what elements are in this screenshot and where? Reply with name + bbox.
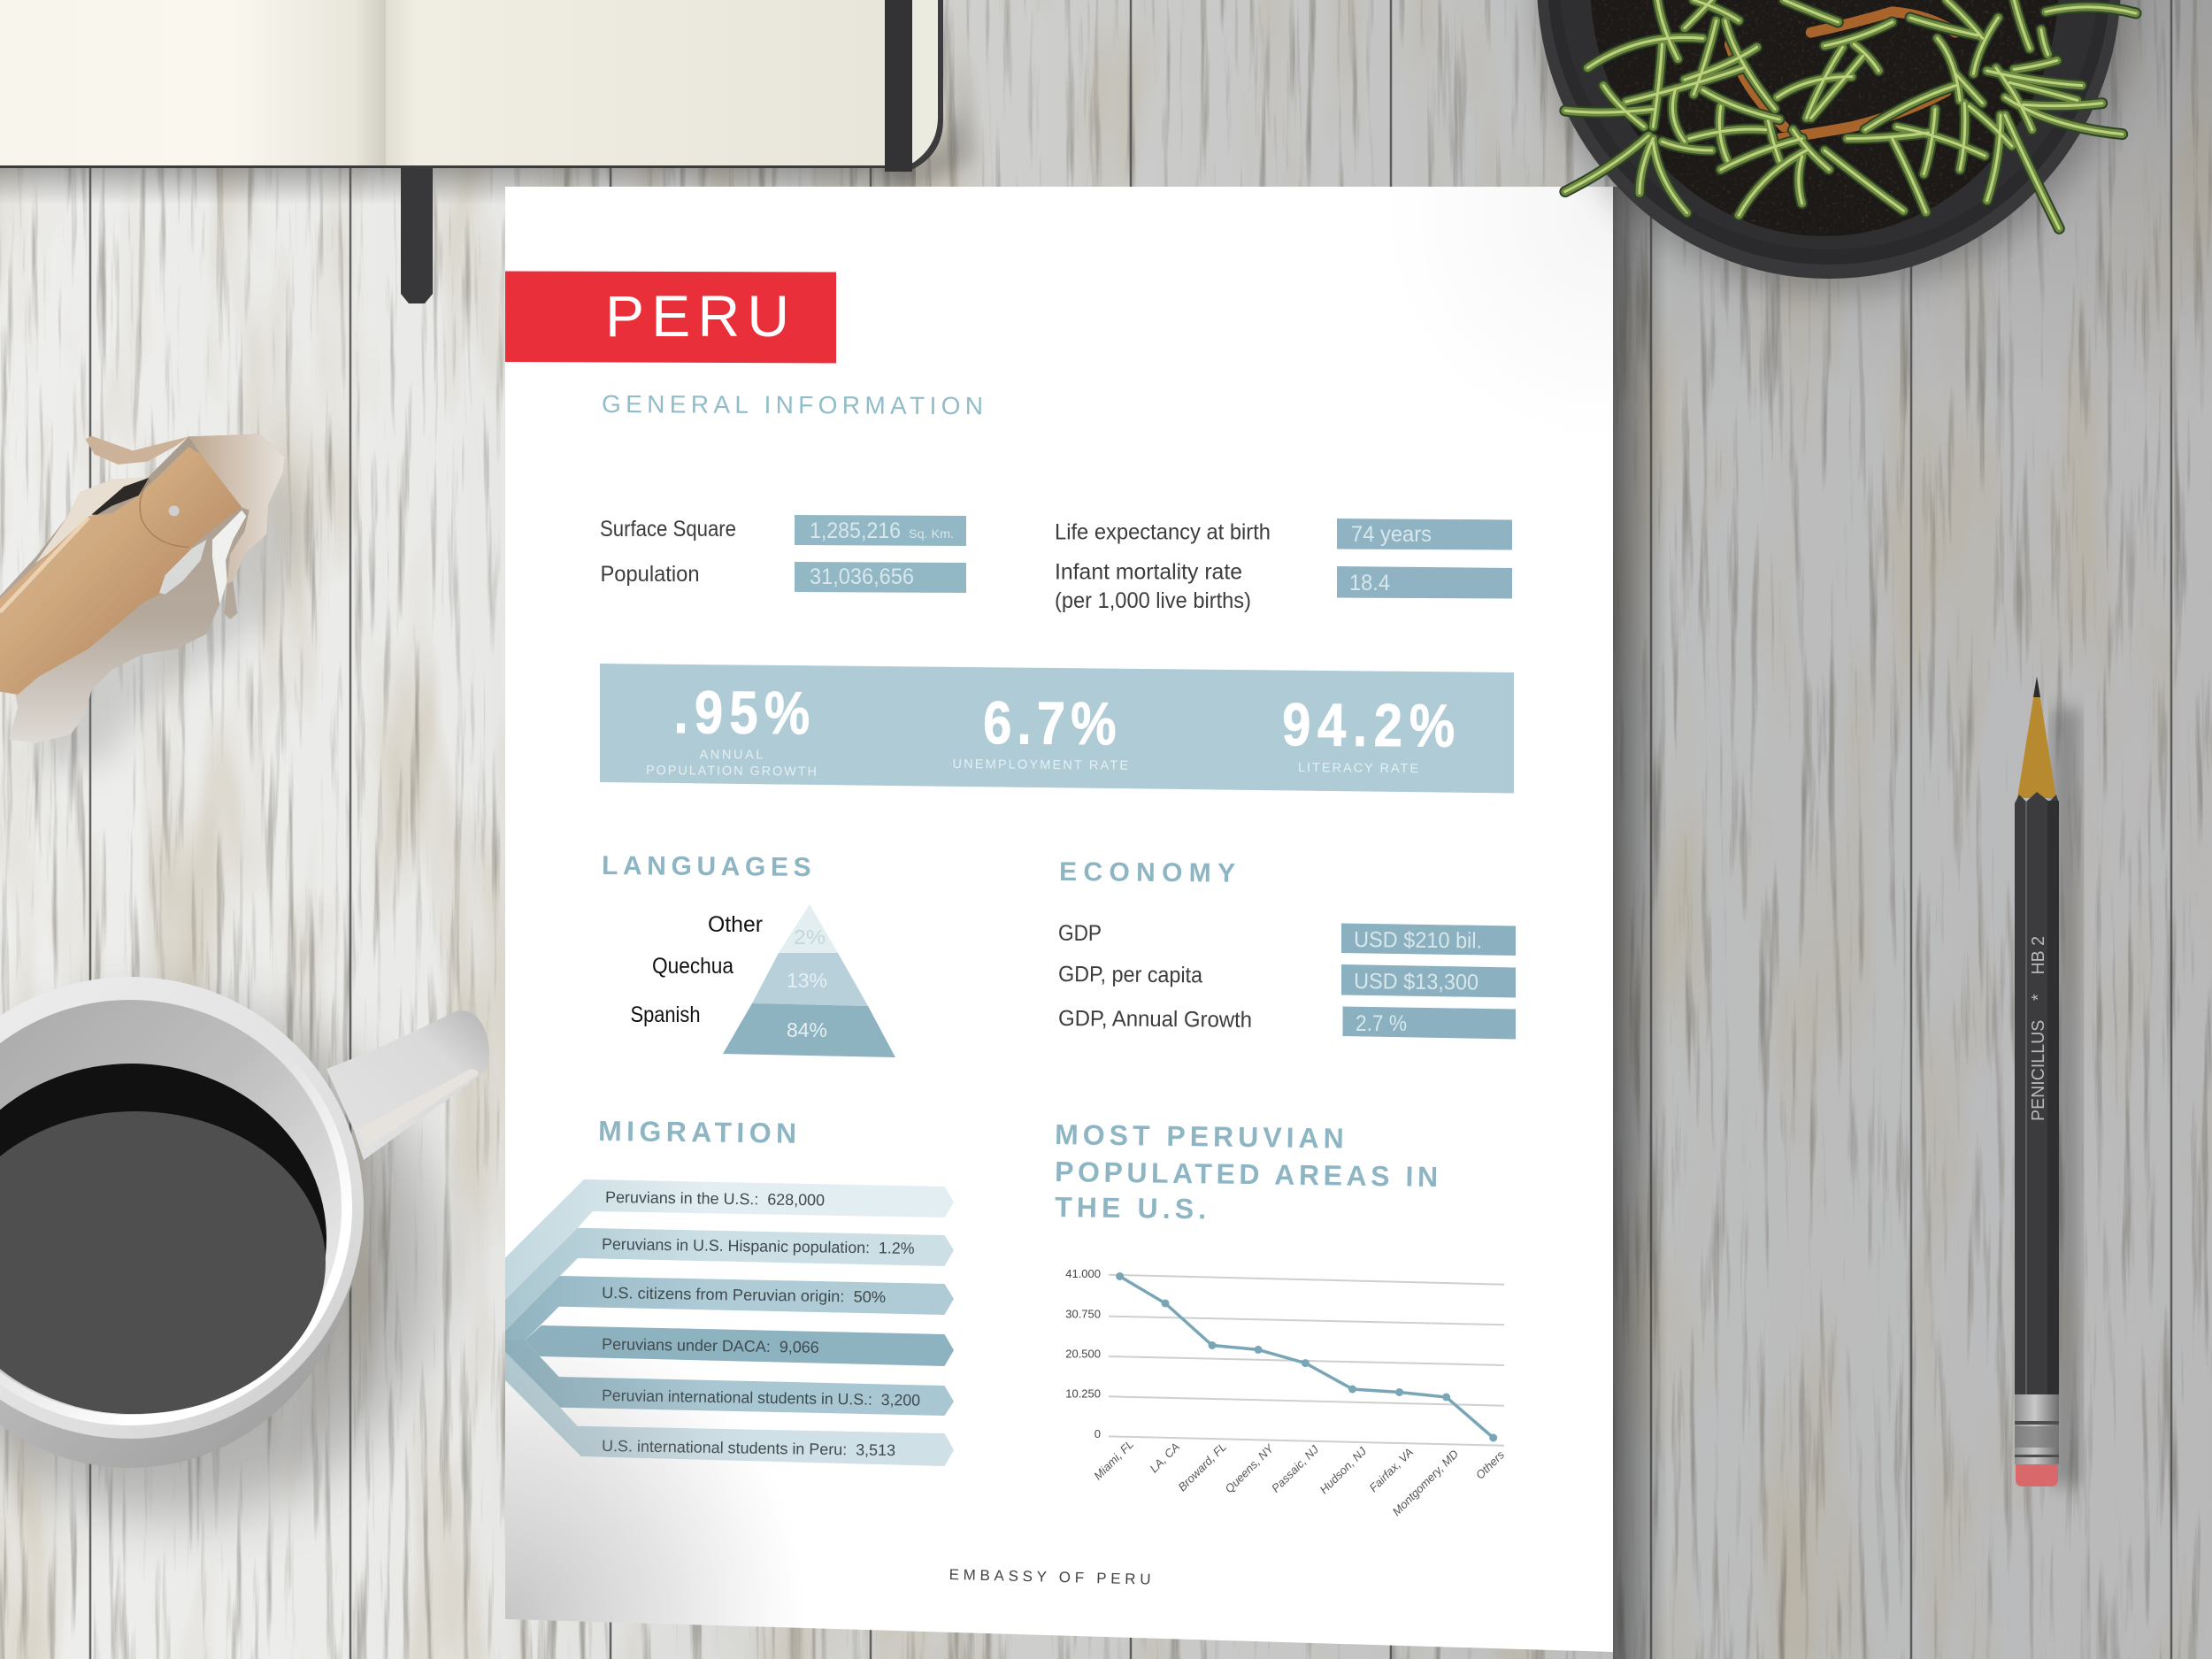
pencil [2015, 676, 2059, 1486]
heading: most Peruvian populated areas: POPULATED AREAS IN [1055, 1156, 1438, 1193]
stat: infant mortality: 18.4 [1349, 571, 1390, 595]
heading: most Peruvian populated areas: MOST PERUVIAN [1055, 1118, 1344, 1155]
economy: GDP annual growth: 2.7 % [1356, 1011, 1407, 1036]
figurine ear [140, 480, 188, 547]
line chart: Hudson, NJ [1317, 1444, 1369, 1496]
figurine tail [86, 436, 188, 465]
heading: languages: LANGUAGES [602, 851, 811, 882]
figure: literacy: LITERACY RATE [1298, 761, 1418, 776]
figure: unemployment [952, 690, 1128, 773]
rosemary plant [1565, 0, 2136, 228]
stat: surface square: 1,285,216 [810, 518, 901, 543]
economy: GDP: GDP [1058, 921, 1102, 946]
figurine leg gaps [159, 540, 206, 595]
languages pyramid: Spanish [630, 1002, 701, 1027]
line chart: Passaic, NJ [1269, 1442, 1321, 1495]
heading: economy: ECONOMY [1059, 857, 1235, 888]
title banner [505, 271, 836, 363]
line chart: Queens, NY [1222, 1441, 1277, 1495]
plant pot [1537, 0, 2121, 279]
stat: population: 31,036,656 [810, 565, 914, 589]
figurine top edge [35, 478, 148, 564]
soil [1584, 0, 2066, 239]
mug shadow [0, 1004, 438, 1517]
pencil label: PENICILLUS * HB 2 [2029, 936, 2048, 1121]
notebook bookmark ribbon [401, 164, 433, 303]
stat: life expectancy: 74 years [1351, 522, 1432, 547]
line chart: 30.750 [1065, 1307, 1101, 1320]
pencil eraser [2016, 1464, 2058, 1486]
infographic paper [505, 187, 1613, 1655]
row: international students in U.S.: Peruvian international students in U.S.: 3,200 [602, 1386, 920, 1409]
line chart: Miami, FL [1091, 1438, 1136, 1482]
key figures band [600, 664, 1514, 793]
heading: most Peruvian populated areas: THE U.S. [1055, 1191, 1206, 1225]
row: Hispanic population [505, 1228, 954, 1331]
figure: unemployment: UNEMPLOYMENT RATE [952, 757, 1128, 773]
notebook shadow [0, 53, 973, 204]
figure: population growth [646, 680, 817, 780]
line chart: Broward, FL [1175, 1440, 1229, 1494]
stat: surface square: Surface Square [600, 517, 736, 541]
economy: GDP annual growth [1058, 1006, 1516, 1039]
plant pot shadow [1540, 0, 2132, 292]
line chart [1065, 1267, 1507, 1518]
figurine wood band [0, 447, 242, 695]
figure: population growth: .95% [673, 680, 810, 747]
economy: GDP per capita: GDP, per capita [1058, 962, 1202, 987]
stat: surface square [600, 515, 966, 546]
figurine shadow [35, 478, 301, 770]
stat: life expectancy: Life expectancy at birth [1055, 520, 1271, 545]
figurine head side [188, 434, 285, 584]
figurine eye slot [91, 478, 149, 515]
languages pyramid: 84% [787, 1018, 827, 1041]
line chart: 41.000 [1065, 1267, 1101, 1280]
heading: migration: MIGRATION [598, 1115, 796, 1149]
open notebook [0, 0, 943, 172]
line chart: Others [1473, 1448, 1507, 1482]
economy: GDP per capita: USD $13,300 [1354, 969, 1479, 995]
line chart: 10.250 [1065, 1387, 1101, 1401]
row: international students in Peru [505, 1352, 954, 1466]
heading: most Peruvian populated areas [1055, 1118, 1438, 1225]
row: DACA [525, 1325, 954, 1366]
figure: unemployment: 6.7% [983, 690, 1117, 757]
row: DACA: Peruvians under DACA: 9,066 [602, 1335, 819, 1356]
line chart: Montgomery, MD [1390, 1448, 1461, 1518]
figure: population growth: POPULATION GROWTH [646, 764, 817, 780]
row: Peruvians in the U.S.: Peruvians in the U.S.: 628,000 [605, 1188, 825, 1209]
line chart: LA, CA [1147, 1440, 1182, 1475]
stat: surface square: Sq. Km. [909, 526, 954, 541]
pencil tip [2017, 676, 2056, 798]
line chart: 20.500 [1065, 1347, 1101, 1361]
heading: general information: GENERAL INFORMATION [602, 390, 983, 419]
line chart: Fairfax, VA [1367, 1446, 1416, 1494]
migration arrow rows [505, 1179, 954, 1466]
line chart: 0 [1094, 1427, 1101, 1440]
economy: GDP per capita [1058, 962, 1516, 998]
languages pyramid: 2% [794, 926, 826, 949]
languages pyramid: Quechua [652, 954, 733, 979]
coffee mug [0, 977, 489, 1468]
row: Hispanic population: Peruvians in U.S. Hispanic population: 1.2% [602, 1235, 915, 1257]
row: international students in Peru: U.S. international students in Peru: 3,513 [602, 1437, 895, 1459]
stat: population: Population [600, 562, 699, 587]
economy: GDP [1058, 921, 1516, 956]
wooden animal figurine [0, 434, 285, 743]
stat: population [600, 562, 966, 593]
figure: population growth: ANNUAL [699, 749, 763, 763]
stat: infant mortality [1055, 559, 1512, 613]
row: citizens: U.S. citizens from Peruvian origin: 50% [602, 1284, 886, 1306]
mug handle [326, 1010, 489, 1160]
stat: life expectancy [1055, 518, 1512, 550]
row: citizens [505, 1276, 954, 1340]
economy: GDP: USD $210 bil. [1354, 927, 1482, 954]
stat: infant mortality: Infant mortality rate [1055, 559, 1242, 584]
languages pyramid: Other [708, 912, 763, 937]
row: Peruvians in the U.S. [505, 1179, 954, 1300]
economy: GDP annual growth: GDP, Annual Growth [1058, 1006, 1252, 1033]
paper drop shadow right [1613, 187, 1668, 1659]
languages pyramid: 13% [787, 969, 827, 992]
pencil ferrule [2015, 1394, 2059, 1464]
pencil shadow [2051, 708, 2081, 1486]
pencil body [2015, 792, 2059, 1394]
figurine lower body [0, 434, 285, 743]
footer: EMBASSY OF PERU [949, 1566, 1151, 1588]
stat: infant mortality: (per 1,000 live births) [1055, 588, 1251, 613]
title banner: PERU [605, 283, 789, 349]
languages pyramid [630, 904, 895, 1057]
figure: literacy: 94.2% [1282, 692, 1455, 760]
row: international students in U.S. [505, 1340, 954, 1416]
